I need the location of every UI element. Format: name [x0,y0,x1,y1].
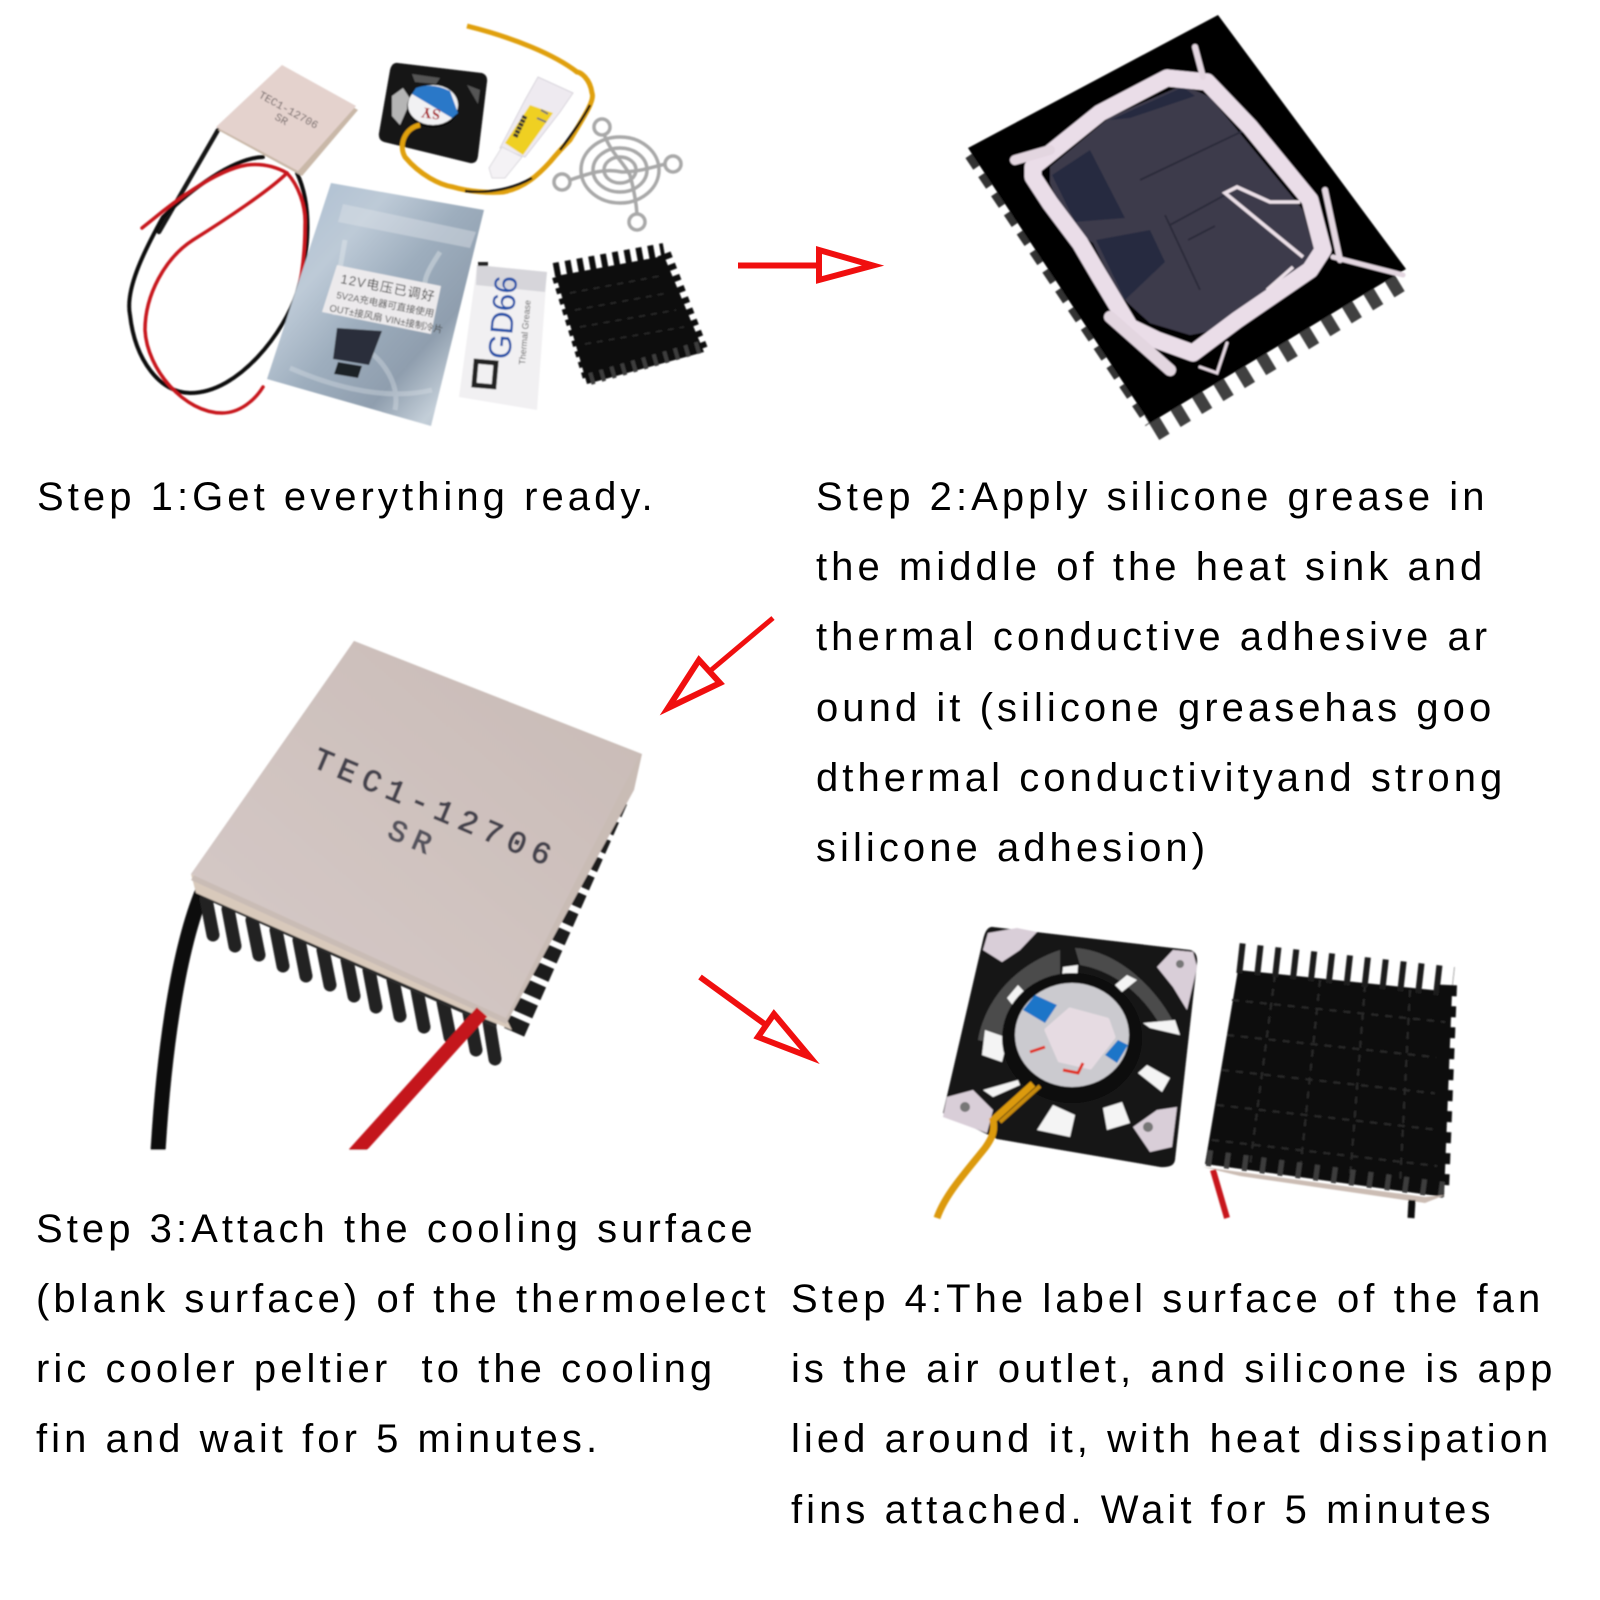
heat sink wires [1213,1170,1412,1218]
text: step 3: (blank surface) of the thermoelect [36,1277,770,1321]
module marking text: TEC1-12706 [307,743,555,875]
translucent blade arcs [978,948,1175,1045]
antistatic bag with label: OUT±接风扇 VIN±接制冷片 [328,302,444,336]
blade-ring dark hub surround [1002,973,1142,1103]
base plate strip [1203,1167,1445,1203]
fan with yellow wire: SY [420,103,442,122]
text: step 2: the middle of the heat sink and [816,545,1486,589]
wires: peltier black and red leads [129,130,308,413]
heat sink [554,250,704,384]
module lower ceramic layer [191,874,512,1030]
antistatic bag with label: 12V电压已调好 [339,271,437,304]
fins below the plate [970,155,1406,428]
grease-filled centre [1050,85,1315,335]
silicone on hub [1047,1010,1113,1067]
blue label bands [1023,995,1128,1063]
GD66 grease packet [459,262,547,410]
antistatic bag with label: 5V2A充电器可直接使用 [335,289,435,320]
text: step 2: silicone adhesion) [816,826,1209,870]
text: step 3: ric cooler peltier to the cooling [36,1347,716,1391]
black wire [158,890,203,1152]
antistatic bag with label [267,183,484,426]
dark shadow patches [1052,87,1195,300]
heat sink grid highlights [1212,975,1445,1185]
silicone smear corners [1015,47,1403,373]
front fins [206,899,495,1059]
text: step 4: lied around it, with heat dissipation [791,1417,1552,1461]
module upper plate [191,641,642,1024]
text: step 2: Step 2:Apply silicone grease in [816,475,1489,519]
panel: step 3 peltier on fins [130,641,642,1162]
GD66 grease packet: GD66 [481,274,524,361]
panel: step 2 heat sink with grease [968,15,1406,428]
text: step 4: is the air outlet, and silicone is app [791,1347,1556,1391]
black base plate [968,15,1406,423]
text: step 3: fin and wait for 5 minutes. [36,1417,601,1461]
fan hub label [1015,983,1129,1087]
text: step 3 [36,1207,770,1461]
arrow: step 2 to step 3 [668,618,773,708]
fan with yellow wire [379,26,593,192]
heat sink right fins [1440,985,1448,1190]
text: step 3: Step 3:Attach the cooling surface [36,1207,757,1251]
white gaps between blades [982,965,1180,1137]
text: step 1: Step 1:Get everything ready. [37,475,657,519]
fan body [943,927,1197,1167]
text: step 2: ound it (silicone greasehas goo [816,686,1495,730]
text: step 2 [816,475,1506,870]
fan wires [937,1084,1040,1218]
GD66 grease packet: Thermal Grease [517,300,533,365]
text: step 4: Step 4:The label surface of the fan [791,1277,1544,1321]
text: step 2: thermal conductive adhesive ar [816,615,1491,659]
fan guard grill [554,119,681,230]
arrow: step 1 to step 2 [738,250,873,280]
dark strip above fins [200,885,498,1028]
fan mounting holes [960,960,1184,1132]
arrow: step 3 to step 4 [700,977,810,1057]
module batch text: SR [382,815,436,863]
faint circuit lines [1140,130,1245,290]
panel: step 1 parts kit photo [129,26,704,426]
red wire [354,1012,482,1154]
right fins [512,800,617,1037]
peltier module: TEC1-12706 [256,90,320,133]
text: step 2: dthermal conductivityand strong [816,756,1506,800]
silicone on fan corners [943,928,1197,1152]
thin silicone loop [1225,187,1303,290]
white silicone ring [1033,78,1323,353]
peltier module [216,65,358,176]
text: step 4 [791,1277,1556,1532]
thermal paste tube [489,77,573,178]
heat sink fins block [1205,970,1452,1197]
bottom crop mask for wires [130,1150,430,1162]
panel: step 4 fan and fins [937,927,1453,1218]
peltier module: SR [272,112,290,129]
text: step 4: fins attached. Wait for 5 minutes [791,1488,1495,1532]
heat sink bottom fins [1207,1158,1444,1190]
red hub marks [1030,1047,1083,1073]
heat sink top fins [1238,958,1453,982]
